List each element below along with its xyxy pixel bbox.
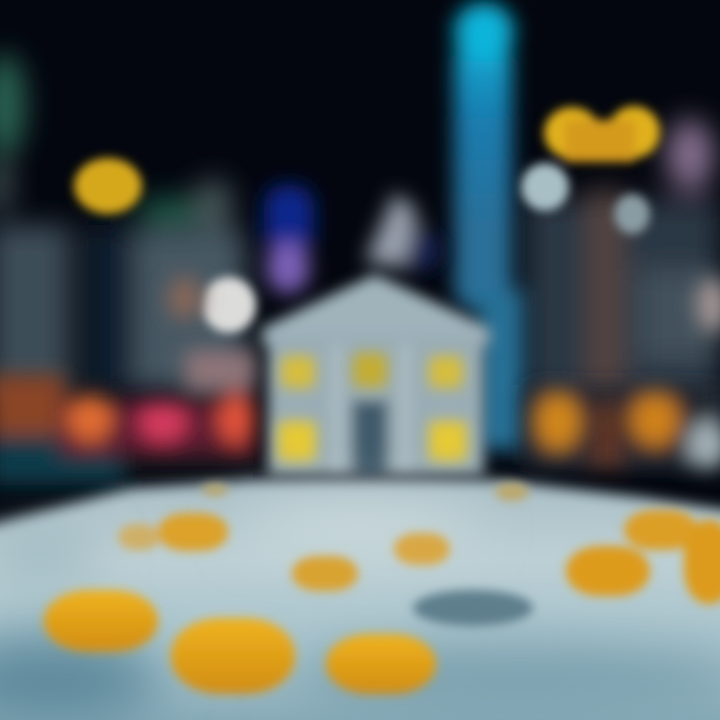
skyline: left buildings bbox=[0, 53, 245, 395]
skyline: right buildings bbox=[525, 119, 720, 460]
glowing lights bbox=[74, 106, 660, 333]
bank building bbox=[262, 274, 490, 476]
ground shading bbox=[0, 503, 720, 720]
blue and purple spire bbox=[264, 185, 442, 294]
coins bbox=[44, 483, 720, 694]
street band: right storefronts bbox=[525, 385, 720, 469]
ground plane bbox=[0, 480, 720, 720]
tall blue tower bbox=[454, 2, 524, 450]
coin shadow bbox=[413, 590, 533, 626]
street band: colourful storefronts left bbox=[0, 350, 260, 485]
bank windows bbox=[278, 353, 467, 461]
bank body bbox=[262, 274, 490, 476]
dim lights bbox=[167, 276, 720, 333]
